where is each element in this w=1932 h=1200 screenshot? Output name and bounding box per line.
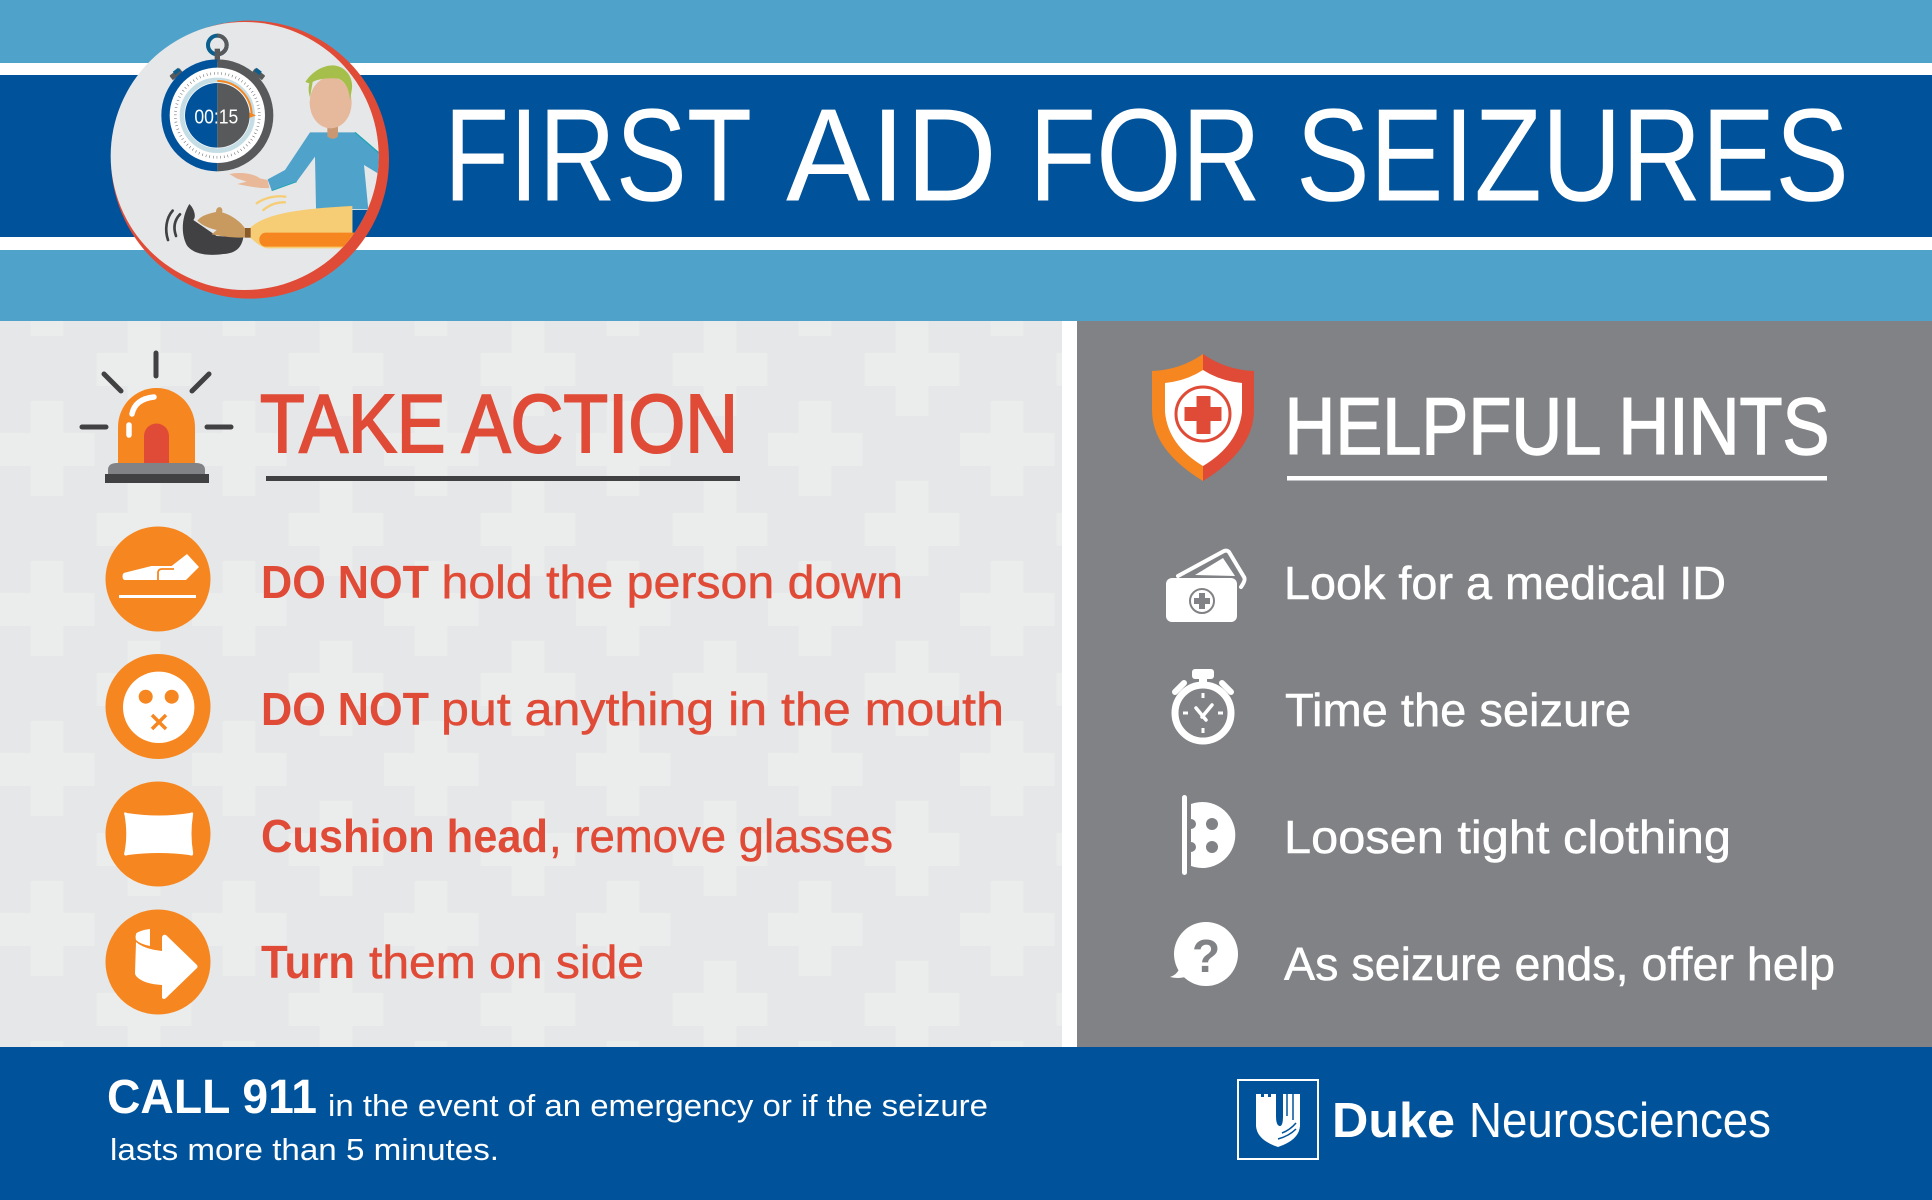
item: loosen clothing: Loosen tight clothing bbox=[1284, 811, 1731, 863]
call 911 message bbox=[107, 1071, 988, 1167]
item: offer help bbox=[1170, 922, 1835, 990]
icon: wallet with medical card bbox=[1166, 551, 1245, 622]
item: turn on side: them on side bbox=[369, 936, 644, 988]
item: cushion head bbox=[106, 782, 893, 886]
icon: question bubble bbox=[1170, 922, 1238, 986]
icon: shield with cross bbox=[1152, 354, 1254, 481]
banner background bbox=[0, 0, 1932, 321]
logo: Duke Neurosciences: Duke bbox=[1332, 1094, 1455, 1148]
item: do not put in mouth: DO NOT bbox=[261, 683, 429, 735]
panel: take action bbox=[0, 321, 1062, 1047]
item: do not hold down: DO NOT bbox=[261, 556, 429, 608]
footer bbox=[0, 1047, 1932, 1200]
item: medical ID bbox=[1166, 551, 1726, 622]
heading: take action: TAKE ACTION bbox=[260, 377, 738, 470]
item: time the seizure bbox=[1175, 669, 1631, 741]
icon: stopwatch outline bbox=[1175, 669, 1231, 741]
icon: stopwatch: 00:15 bbox=[194, 106, 238, 129]
icon: hand above surface bbox=[106, 526, 210, 632]
heading underline bbox=[1287, 476, 1827, 480]
item: time the seizure: Time the seizure bbox=[1285, 684, 1631, 736]
title: FIRST bbox=[444, 82, 752, 228]
item: do not hold down bbox=[106, 526, 903, 632]
logo: Duke Neurosciences: Neurosciences bbox=[1469, 1094, 1771, 1148]
item: medical ID: Look for a medical ID bbox=[1284, 557, 1726, 609]
item: cushion head: , remove glasses bbox=[549, 810, 893, 862]
call 911 message: lasts more than 5 minutes. bbox=[110, 1132, 499, 1167]
item: do not put in mouth bbox=[106, 654, 1004, 759]
item: cushion head: Cushion head bbox=[261, 810, 548, 862]
icon: pillow bbox=[106, 782, 210, 886]
illustration: responder timing a seizure bbox=[111, 21, 389, 299]
divider bbox=[1062, 321, 1077, 1047]
title bbox=[444, 82, 1849, 228]
icon: face with crossed mouth bbox=[106, 654, 210, 759]
icon: turning arrow bbox=[106, 910, 210, 1014]
person kneeling bbox=[229, 65, 383, 237]
item: loosen clothing bbox=[1182, 795, 1731, 875]
icon: stopwatch bbox=[161, 36, 273, 171]
item: turn on side bbox=[106, 910, 644, 1014]
title: AID bbox=[786, 82, 997, 228]
icon: shirt buttons bbox=[1182, 795, 1235, 875]
call 911 message: CALL 911 bbox=[107, 1071, 317, 1124]
panel: helpful hints bbox=[1077, 321, 1932, 1047]
heading underline bbox=[266, 476, 740, 481]
person lying on side bbox=[166, 196, 366, 255]
icon: siren bbox=[82, 353, 231, 483]
title: FOR bbox=[1029, 82, 1261, 228]
item: do not put in mouth: put anything in the mouth bbox=[441, 683, 1004, 735]
item: offer help: As seizure ends, offer help bbox=[1284, 938, 1835, 990]
icon: question bubble: ? bbox=[1192, 930, 1220, 982]
call 911 message: in the event of an emergency or if the seizure bbox=[328, 1088, 988, 1123]
item: turn on side: Turn bbox=[261, 936, 355, 988]
logo: Duke Neurosciences bbox=[1238, 1080, 1771, 1159]
heading: helpful hints: HELPFUL HINTS bbox=[1284, 382, 1830, 472]
item: do not hold down: hold the person down bbox=[442, 556, 903, 608]
